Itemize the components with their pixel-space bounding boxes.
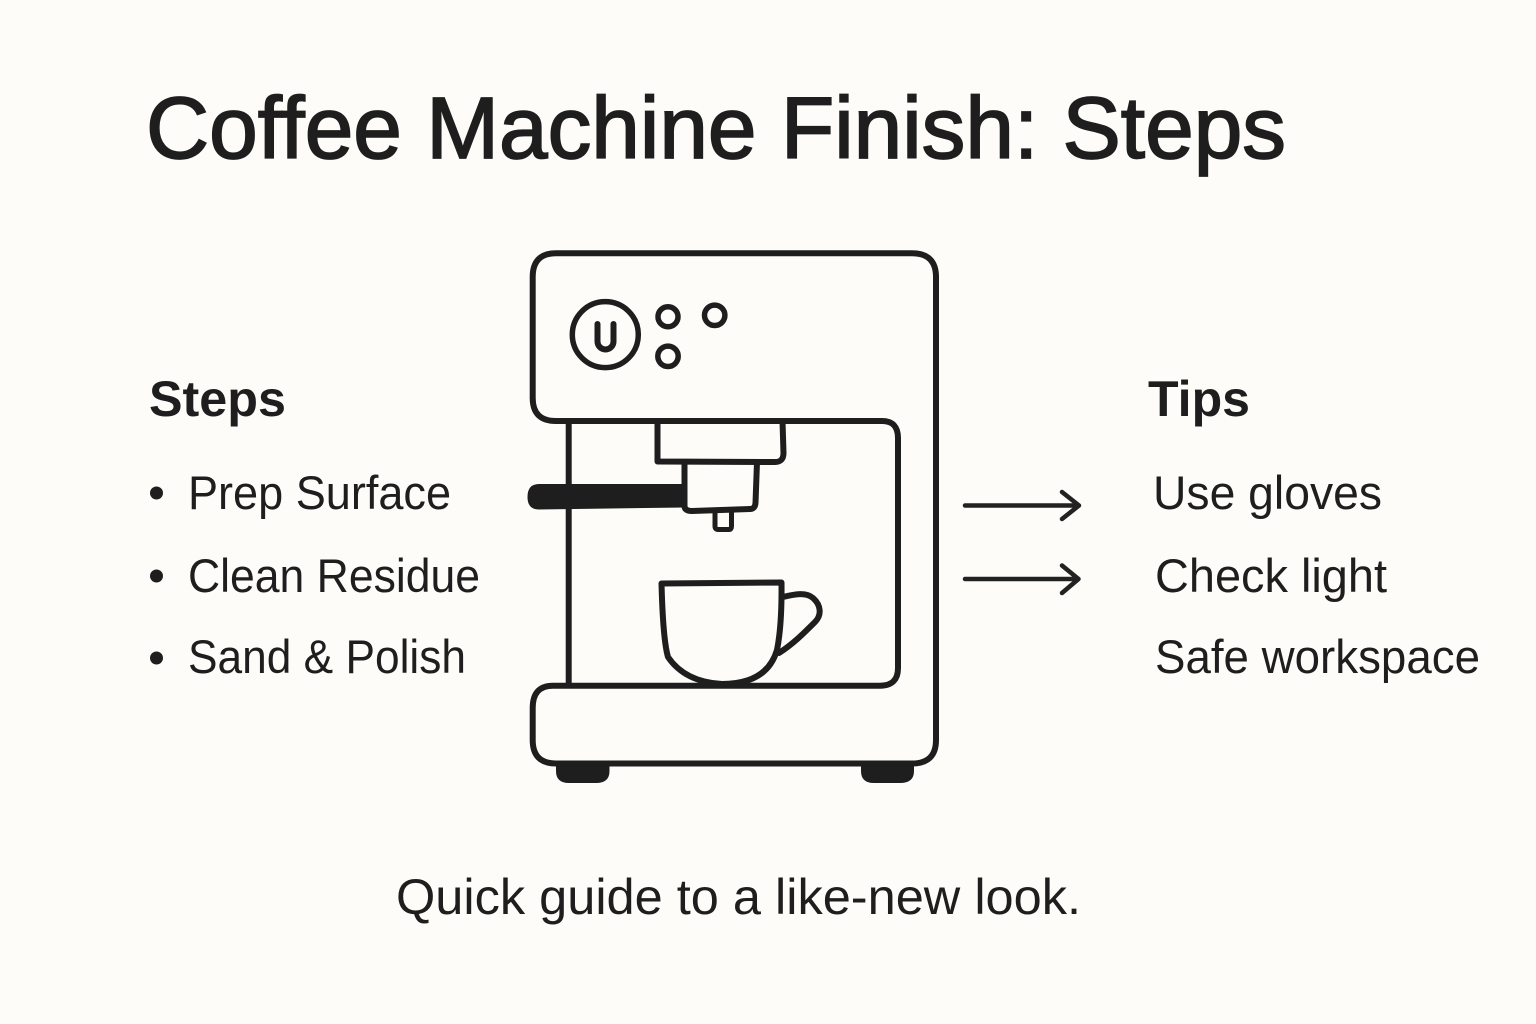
step item: clean residue: Clean Residue — [188, 549, 480, 602]
tip: use gloves: Use gloves — [1153, 466, 1382, 519]
tip: safe workspace: Safe workspace — [1155, 630, 1480, 683]
heading: steps: Steps — [149, 371, 286, 427]
icon: espresso machine — [528, 253, 936, 783]
coffee cup — [662, 582, 820, 684]
heading: tips: Tips — [1148, 371, 1250, 427]
small button top left — [658, 307, 678, 327]
machine column line — [566, 421, 572, 685]
panel: steps — [149, 371, 480, 683]
arrow: top — [965, 492, 1079, 519]
title: Coffee Machine Finish: Steps — [146, 80, 1286, 177]
small button top right — [704, 305, 725, 325]
machine foot right — [861, 764, 914, 783]
machine body outline — [533, 253, 936, 764]
arrow: bottom — [965, 566, 1078, 593]
portafilter handle — [528, 484, 685, 510]
group head — [658, 421, 784, 462]
footer caption: Quick guide to a like-new look. — [396, 869, 1081, 925]
portafilter basket — [684, 462, 757, 511]
step item: sand and polish: Sand & Polish — [188, 630, 466, 683]
small button bottom — [658, 346, 678, 366]
step item: prep surface: Prep Surface — [188, 466, 451, 519]
tip: check light: Check light — [1155, 549, 1387, 602]
portafilter spout — [715, 510, 732, 530]
panel: tips — [1148, 371, 1480, 683]
machine foot left — [556, 764, 610, 783]
power button — [572, 302, 638, 368]
